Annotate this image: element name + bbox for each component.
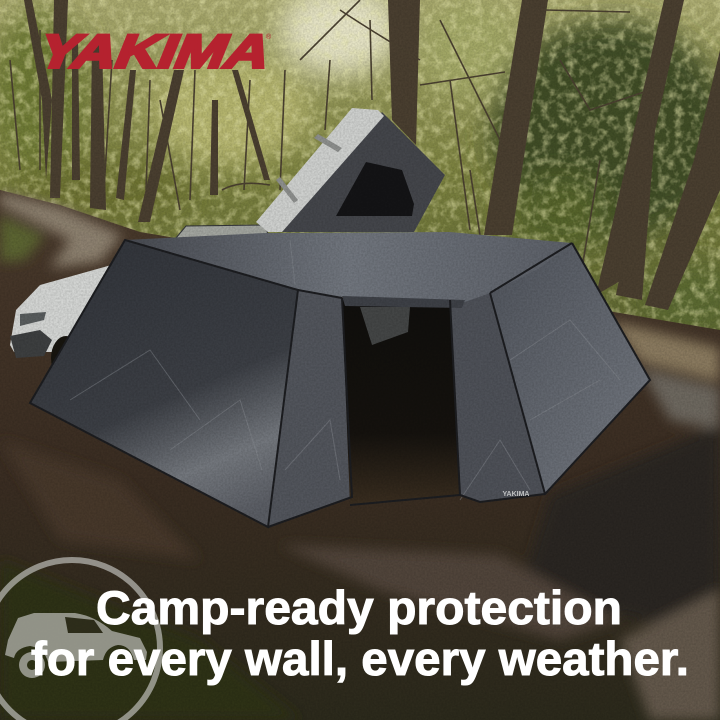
right wall <box>490 243 650 494</box>
tent body <box>282 112 445 232</box>
rooftop tent <box>256 108 445 232</box>
roof <box>125 232 572 302</box>
background: ground <box>0 190 720 720</box>
wrinkles <box>70 240 620 500</box>
tent window <box>336 162 414 216</box>
vehicle <box>10 264 120 380</box>
background: forest <box>0 0 720 340</box>
thin branches <box>10 0 650 280</box>
wall logo: YAKIMA <box>503 491 529 498</box>
icon: vehicle in circle <box>0 560 160 720</box>
headline line 2: for every wall, every weather. <box>31 632 689 685</box>
front left panel <box>268 290 352 527</box>
door flap <box>342 296 465 308</box>
registered mark: ® <box>266 33 272 41</box>
headline line 1: Camp-ready protection <box>96 581 622 634</box>
tree trunks <box>24 0 720 310</box>
front right panel <box>450 293 545 502</box>
foliage texture <box>0 0 720 340</box>
roof rack <box>176 225 268 238</box>
tent lid <box>256 108 384 232</box>
headline <box>31 581 689 685</box>
seams <box>30 240 650 527</box>
lid brackets <box>276 134 342 203</box>
doorway <box>342 300 460 505</box>
awning room tent <box>30 232 650 527</box>
logo: Yakima: YAKIMA <box>30 26 281 78</box>
left wall <box>30 240 298 527</box>
